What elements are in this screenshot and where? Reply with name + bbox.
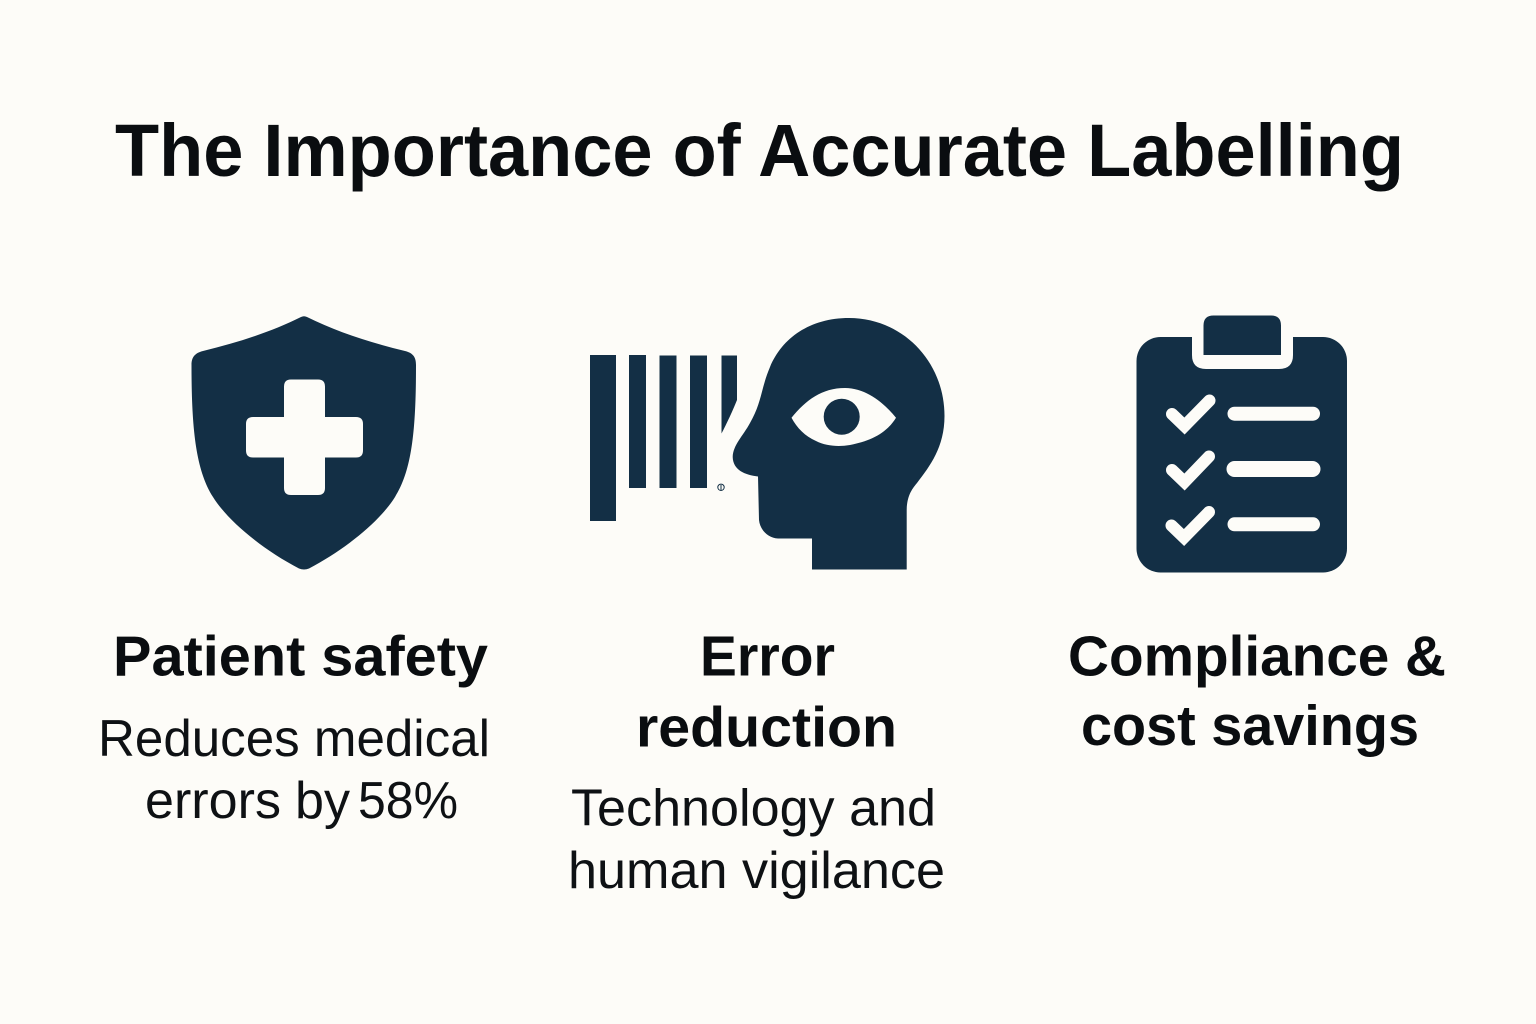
text: reduces medical errors (98, 710, 490, 830)
heading: compliance and cost savings: Compliance & (1068, 624, 1446, 688)
text: technology and human vigilance: human vigilance (568, 842, 945, 900)
heading: error reduction: reduction (636, 696, 897, 760)
panel: compliance and cost savings (1068, 316, 1446, 758)
icon: clipboard checklist (1136, 316, 1347, 572)
heading: compliance and cost savings: cost savings (1081, 694, 1419, 758)
icon: head with eye (733, 318, 944, 570)
text: reduces medical errors: Reduces medical (98, 710, 490, 768)
text: technology and human vigilance (568, 780, 945, 900)
heading: error reduction (636, 624, 897, 760)
text: reduces medical errors: errors (145, 772, 281, 830)
text: technology and human vigilance: Technology and (571, 780, 936, 838)
text: reduces medical errors: 58% (358, 772, 458, 830)
icon: barcode (590, 355, 737, 521)
panel: patient safety (98, 316, 490, 830)
text: reduces medical errors: by (295, 772, 350, 830)
icon: shield with medical cross (192, 316, 416, 570)
panel: error reduction (568, 318, 945, 900)
heading: error reduction: Error (700, 624, 835, 688)
heading: compliance and cost savings (1068, 624, 1446, 758)
heading: patient safety: Patient safety (113, 624, 488, 688)
title: The Importance of Accurate Labelling (115, 109, 1404, 192)
